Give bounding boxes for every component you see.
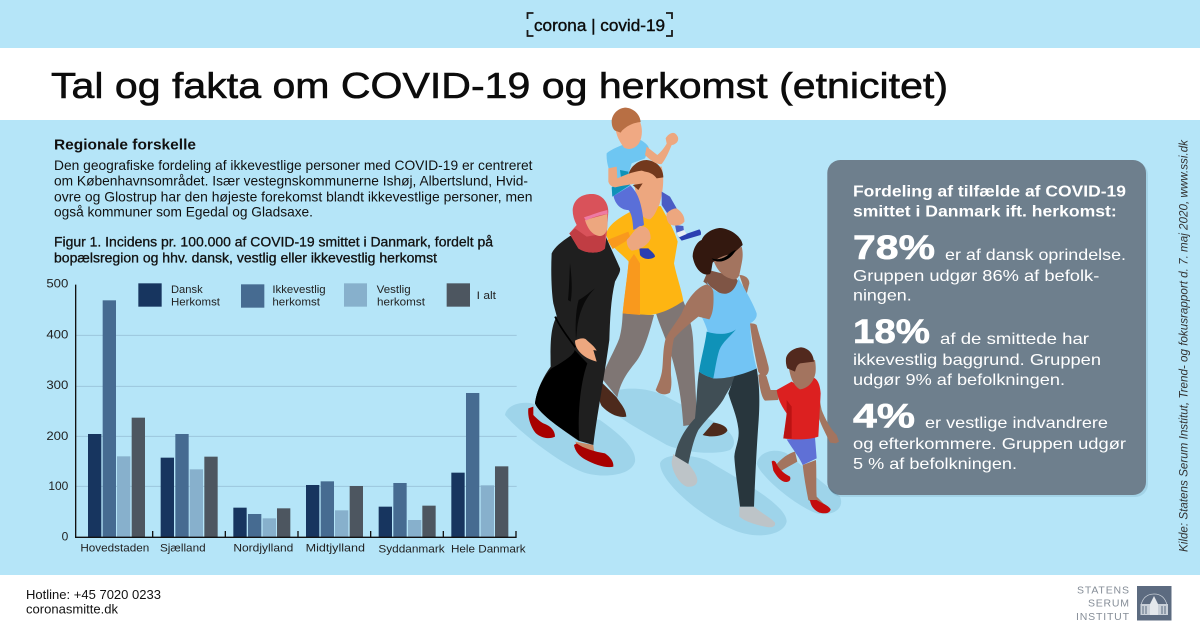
statistic: 18%: udgør 9% af befolkningen. bbox=[853, 372, 1065, 389]
logo: Statens Serum Institut bbox=[1076, 584, 1172, 623]
chart axes bbox=[76, 285, 517, 537]
footer contact bbox=[26, 587, 161, 616]
bars: Syddanmark bbox=[379, 483, 436, 537]
chart legend bbox=[138, 283, 497, 309]
statistic: 4%: og efterkommere. Gruppen udgør bbox=[853, 436, 1127, 453]
body paragraph: også kommuner som Egedal og Gladsaxe. bbox=[54, 204, 313, 220]
y-axis labels: 0 bbox=[62, 530, 69, 544]
chart legend: Vestlig bbox=[377, 284, 411, 296]
bars: Midtjylland bbox=[306, 481, 363, 537]
statistic: 4% bbox=[853, 398, 1127, 473]
chart legend: Ikkevestlig bbox=[272, 284, 326, 296]
statistic: 18%: 18% bbox=[853, 313, 930, 351]
child on shoulders bbox=[607, 108, 701, 259]
chart legend: Dansk bbox=[171, 284, 203, 296]
bars: Sjælland bbox=[161, 434, 218, 537]
chart legend: I alt bbox=[477, 290, 497, 302]
x-axis region labels: Syddanmark bbox=[378, 544, 445, 556]
footer band bbox=[0, 575, 1200, 634]
panel heading: smittet i Danmark ift. herkomst: bbox=[853, 204, 1117, 221]
body paragraph: Den geografiske fordeling af ikkevestlige personer med COVID-19 er centreret bbox=[54, 157, 533, 173]
statistic: 4%: er vestlige indvandrere bbox=[925, 415, 1108, 432]
statistic: 78%: ningen. bbox=[853, 288, 912, 305]
statistic: 18% bbox=[853, 313, 1101, 389]
bars: Hele Danmark bbox=[451, 393, 508, 537]
bars: Nordjylland bbox=[233, 508, 290, 537]
heading: Regionale forskelle: Regionale forskelle bbox=[54, 138, 196, 154]
body paragraph bbox=[54, 157, 533, 220]
statistic: 78% bbox=[853, 229, 1126, 305]
x-axis region labels: Sjælland bbox=[160, 543, 206, 555]
statistic: 18%: ikkevestlig baggrund. Gruppen bbox=[853, 352, 1101, 369]
y-axis labels: 500 bbox=[46, 277, 69, 291]
woman in hijab bbox=[528, 194, 620, 467]
logo: Statens Serum Institut: SERUM bbox=[1088, 598, 1129, 610]
panel heading bbox=[853, 184, 1126, 221]
y-axis labels bbox=[46, 277, 69, 544]
chart legend: herkomst bbox=[377, 297, 426, 309]
woman in blue top bbox=[656, 228, 775, 527]
x-axis region labels: Hovedstaden bbox=[80, 543, 149, 555]
man's hands bbox=[627, 208, 684, 251]
statistic: 78%: Gruppen udgør 86% af befolk- bbox=[853, 268, 1099, 285]
body paragraph: om Københavnsområdet. Især vestegnskommunerne Ishøj, Albertslund, Hvid- bbox=[54, 173, 528, 189]
y-axis labels: 200 bbox=[46, 429, 69, 443]
y-axis labels: 100 bbox=[48, 479, 69, 493]
footer contact: coronasmitte.dk bbox=[26, 602, 118, 616]
figure caption: Figur 1. Incidens pr. 100.000 af COVID-19 smittet i Danmark, fordelt på bbox=[54, 235, 494, 250]
small child in red shirt bbox=[758, 347, 839, 513]
panel heading: Fordeling af tilfælde af COVID-19 bbox=[853, 184, 1126, 201]
statistic: 78%: 78% bbox=[853, 229, 935, 267]
figure caption bbox=[54, 235, 494, 266]
header tag: corona | covid-19: corona | covid-19 bbox=[534, 16, 665, 35]
source note: Kilde: Statens Serum Institut, Trend- og fokusrapport d. 7. maj 2020, www.ssi.dk bbox=[1176, 139, 1190, 552]
icon: institute building bbox=[1137, 586, 1172, 620]
illustration: family walking bbox=[505, 108, 841, 535]
bars: Hovedstaden bbox=[88, 300, 145, 537]
title band: Tal og fakta om COVID-19 og herkomst (etnicitet) bbox=[51, 65, 948, 106]
ground shadows bbox=[505, 389, 841, 535]
body paragraph: ovre og Glostrup har den højeste forekomst blandt ikkevestlige personer, men bbox=[54, 188, 532, 204]
man with yellow shirt bbox=[598, 160, 727, 436]
logo: Statens Serum Institut: INSTITUT bbox=[1076, 611, 1130, 623]
panel: distribution of cases bbox=[827, 160, 1148, 497]
statistic: 78%: er af dansk oprindelse. bbox=[945, 247, 1126, 264]
footer contact: Hotline: +45 7020 0233 bbox=[26, 587, 161, 602]
chart legend: herkomst bbox=[272, 297, 321, 309]
title band bbox=[0, 48, 1200, 120]
statistic: 4%: 4% bbox=[853, 398, 915, 436]
chart legend: Herkomst bbox=[171, 297, 221, 309]
y-axis labels: 400 bbox=[46, 328, 69, 342]
bar chart: incidence per 100,000 by region and origin bbox=[46, 277, 526, 556]
text block: regional differences bbox=[54, 138, 533, 220]
statistic: 18%: af de smittede har bbox=[940, 331, 1090, 348]
x-axis region labels: Hele Danmark bbox=[451, 544, 526, 556]
y-axis labels: 300 bbox=[46, 378, 69, 392]
x-axis region labels bbox=[80, 543, 526, 556]
x-axis region labels: Midtjylland bbox=[306, 543, 365, 555]
statistic: 4%: 5 % af befolkningen. bbox=[853, 456, 1017, 473]
logo: Statens Serum Institut: STATENS bbox=[1077, 584, 1129, 596]
figure caption: bopælsregion og hhv. dansk, vestlig eller ikkevestlig herkomst bbox=[54, 251, 437, 266]
x-axis region labels: Nordjylland bbox=[233, 543, 293, 555]
